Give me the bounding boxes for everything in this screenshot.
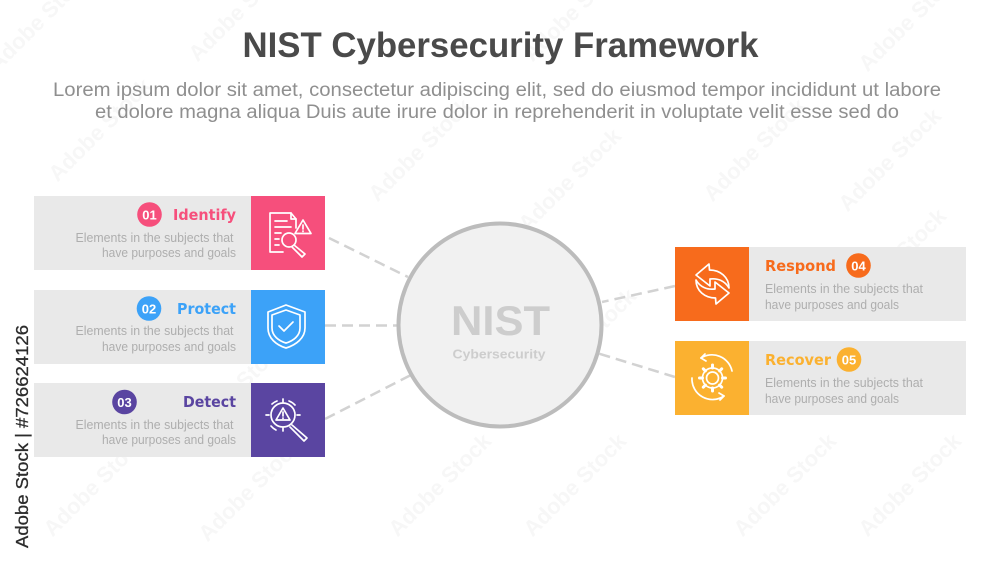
stock id caption: Adobe Stock | #726624126	[12, 325, 32, 548]
panel: identify	[34, 196, 325, 270]
text: Adobe Stock	[38, 428, 152, 541]
text: Adobe Stock	[43, 73, 157, 186]
icon: shield with check	[268, 305, 305, 348]
text: Adobe Stock	[838, 203, 952, 316]
panel: protect	[34, 290, 325, 364]
title: NIST Cybersecurity Framework	[242, 26, 759, 65]
heading recover: Recover	[765, 351, 832, 369]
number badge 02	[137, 296, 161, 321]
text: Adobe Stock	[178, 333, 292, 446]
description detect: Elements in the subjects that	[76, 418, 234, 432]
text: Adobe Stock	[853, 428, 967, 541]
description text: Lorem ipsum dolor sit amet, consectetur adipiscing elit, sed do eiusmod tempor incididunt ut labore	[53, 80, 941, 101]
description text	[53, 80, 941, 123]
description detect: have purposes and goals	[102, 433, 236, 447]
number badge 04: 04	[851, 258, 866, 273]
heading detect: Detect	[183, 393, 236, 411]
number badge 05	[837, 347, 861, 372]
number badge 03	[112, 390, 137, 414]
icon: document search with warning	[270, 213, 311, 257]
text: Adobe Stock	[513, 123, 627, 236]
description respond: have purposes and goals	[765, 298, 899, 312]
heading respond: Respond	[765, 257, 836, 275]
central circle	[398, 224, 602, 426]
description respond: Elements in the subjects that	[765, 282, 924, 296]
description protect: Elements in the subjects that	[76, 324, 234, 338]
number badge 04	[846, 253, 871, 278]
description recover: have purposes and goals	[765, 392, 899, 406]
dashed connector lines	[325, 238, 675, 419]
number badge 05: 05	[842, 352, 856, 367]
description protect	[76, 324, 236, 354]
panel: detect	[34, 383, 325, 457]
description identify	[76, 231, 236, 260]
text: Adobe Stock	[193, 433, 307, 546]
heading identify: Identify	[173, 206, 236, 224]
circle heading: NIST	[451, 297, 550, 344]
description recover	[765, 376, 924, 406]
circle subheading: Cybersecurity	[452, 346, 546, 362]
description identify: have purposes and goals	[102, 246, 236, 260]
number badge 02: 02	[142, 301, 156, 316]
description identify: Elements in the subjects that	[76, 231, 234, 245]
panel: respond	[675, 247, 966, 321]
description detect	[76, 418, 236, 447]
number badge 01: 01	[142, 207, 157, 222]
heading protect: Protect	[177, 300, 236, 318]
text: Adobe Stock	[518, 428, 632, 541]
text: Adobe Stock	[363, 93, 477, 206]
panel: recover	[675, 341, 966, 415]
description respond	[765, 282, 924, 312]
description protect: have purposes and goals	[102, 340, 236, 354]
description recover: Elements in the subjects that	[765, 376, 924, 390]
description text: et dolore magna aliqua Duis aute irure dolor in reprehenderit in voluptate velit esse sed do	[95, 102, 899, 123]
icon: magnifier with warning	[266, 399, 307, 441]
number badge 03: 03	[117, 395, 132, 410]
number badge 01	[137, 202, 162, 227]
text: Adobe Stock	[833, 103, 947, 216]
icon: two swap arrows	[696, 264, 729, 304]
text: Adobe Stock	[698, 93, 812, 206]
text: Adobe Stock	[528, 283, 642, 396]
icon: gear with cycle arrows	[692, 354, 732, 400]
text: Adobe Stock	[728, 428, 842, 541]
text: Adobe Stock	[383, 428, 497, 541]
